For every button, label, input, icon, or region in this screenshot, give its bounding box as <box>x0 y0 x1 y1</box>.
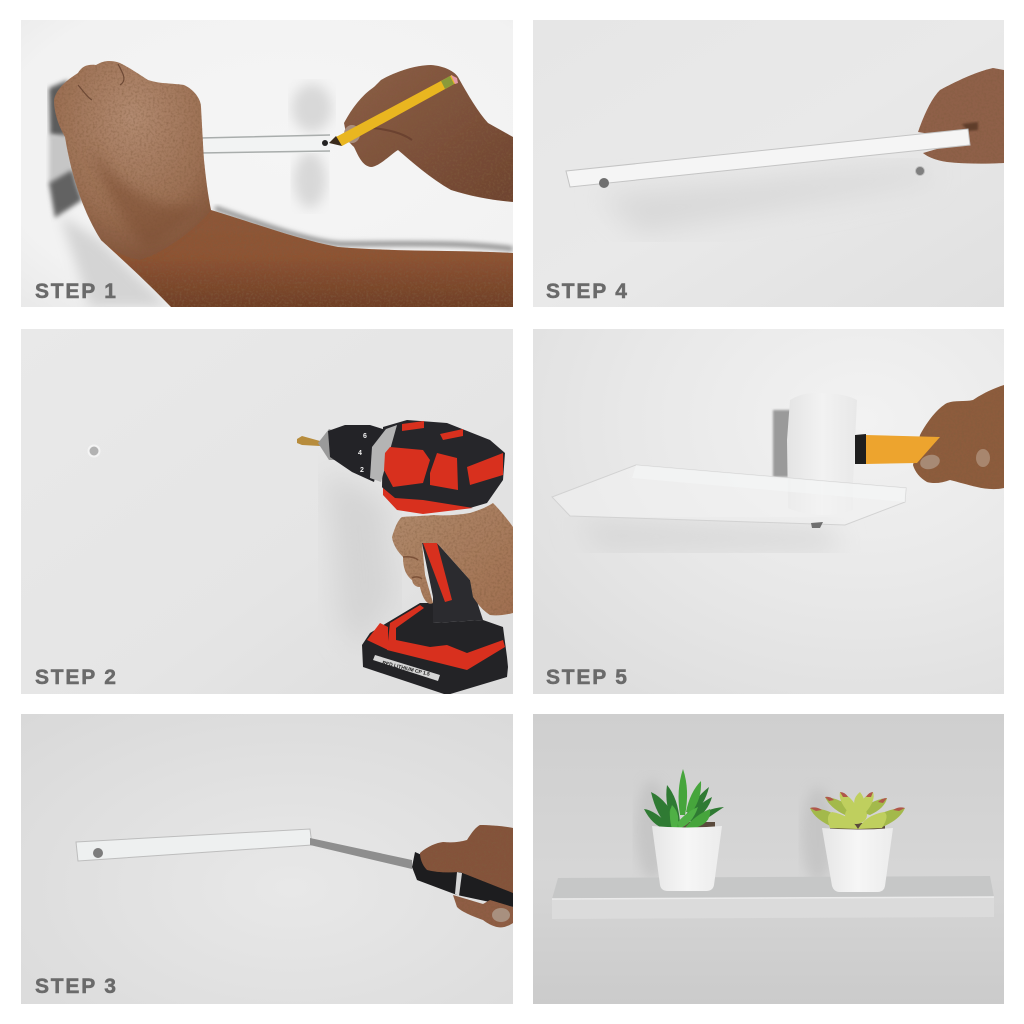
drill chuck with numbers: 4 <box>358 450 362 457</box>
step label: STEP 1 <box>35 280 118 303</box>
step label: STEP 5 <box>546 666 629 689</box>
plant left <box>644 769 724 830</box>
acrylic bracket <box>200 135 330 153</box>
drilled hole <box>88 446 100 456</box>
screwdriver shaft <box>310 838 412 869</box>
white mallet head <box>787 399 856 478</box>
acrylic shelf <box>566 129 970 187</box>
plant right <box>810 792 905 830</box>
drill bit <box>297 436 320 446</box>
step label: STEP 4 <box>546 280 629 303</box>
shelf shadow <box>618 176 874 232</box>
drill chuck with numbers: 6 <box>363 433 367 440</box>
screw <box>93 848 103 858</box>
panel: step 3 screwing bracket <box>21 714 513 1004</box>
shelf <box>552 876 994 919</box>
screw right <box>916 166 924 176</box>
panel: step 4 sliding shelf on <box>533 20 1004 307</box>
fingers <box>920 449 990 470</box>
forearm <box>101 210 513 307</box>
step label: STEP 2 <box>35 666 118 689</box>
drill body <box>370 420 505 514</box>
drill grip <box>422 543 483 623</box>
mallet handle <box>855 434 940 464</box>
panel: step 5 mallet <box>533 329 1004 694</box>
right hand <box>344 65 513 202</box>
panel: step 1 marking with pencil <box>21 20 513 307</box>
panel: step 2 drilling <box>21 329 513 695</box>
drill chuck with numbers: 2 <box>360 467 364 474</box>
plant shadows on wall <box>636 780 834 883</box>
screw left <box>599 178 609 188</box>
hand <box>918 68 1004 164</box>
drill shadow <box>328 482 391 630</box>
battery: RED LITHIUM CP 1.5 <box>382 660 431 678</box>
drill collar <box>318 429 335 460</box>
hand <box>913 385 1004 489</box>
acrylic shelf <box>552 465 906 525</box>
white pot right <box>822 828 893 892</box>
screw <box>811 522 823 528</box>
panel: finished shelf with plants <box>533 714 1004 1004</box>
mallet shadow <box>773 410 791 477</box>
screwdriver handle <box>412 852 513 907</box>
white pot left <box>652 826 722 891</box>
pencil <box>329 75 458 146</box>
hand on grip <box>392 503 513 615</box>
step label: STEP 3 <box>35 975 118 998</box>
hand <box>420 825 513 927</box>
shelf shadow <box>598 522 828 553</box>
battery <box>362 603 508 695</box>
shadows on wall around the fist and pencil <box>49 80 513 307</box>
drill chuck with numbers <box>328 425 386 482</box>
acrylic bracket <box>76 829 312 861</box>
left fist <box>54 61 211 260</box>
